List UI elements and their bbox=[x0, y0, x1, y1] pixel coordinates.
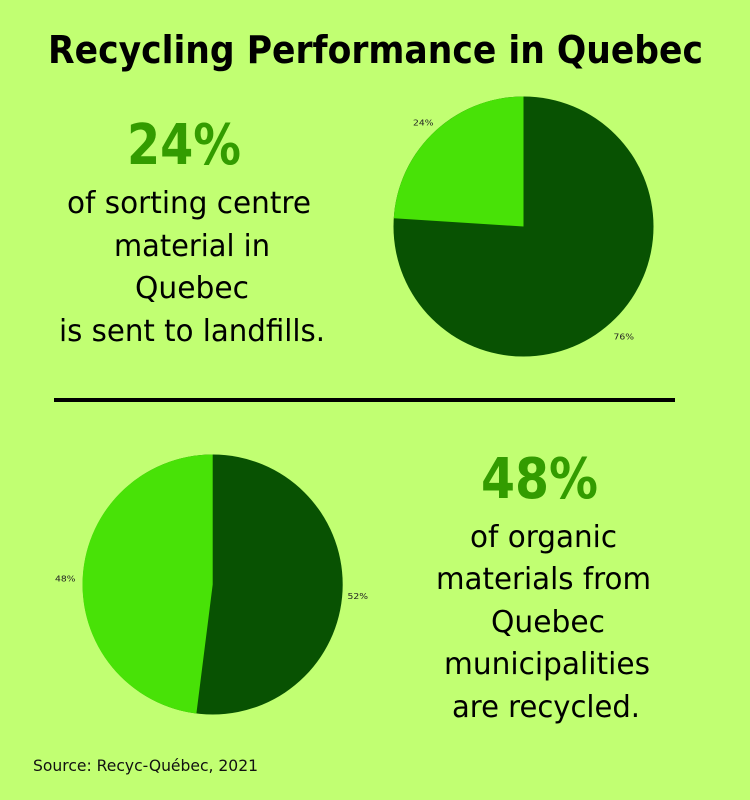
text block: sorting centre description: material in bbox=[114, 229, 270, 264]
divider line bbox=[54, 398, 675, 402]
pie chart: organic materials: 52% bbox=[348, 592, 368, 601]
text block: sorting centre description bbox=[59, 186, 325, 349]
pie chart: sorting centre material bbox=[394, 96, 654, 356]
text block: sorting centre description: Quebec bbox=[135, 271, 249, 306]
text block: sorting centre description: is sent to landfills. bbox=[59, 314, 325, 349]
text block: organic materials description: municipalities bbox=[444, 647, 650, 682]
source note: Source: Recyc-Québec, 2021 bbox=[33, 756, 258, 775]
text block: organic materials description: materials from bbox=[436, 562, 651, 597]
pie chart: organic materials bbox=[55, 454, 368, 714]
big number: 24%: 24% bbox=[127, 113, 241, 178]
text block: organic materials description: of organic bbox=[470, 520, 617, 555]
text block: organic materials description: Quebec bbox=[491, 605, 605, 640]
pie chart: organic materials: 48% bbox=[55, 574, 76, 584]
pie chart: sorting centre material: 24% bbox=[413, 118, 434, 128]
big number: 48%: 48% bbox=[481, 447, 598, 512]
title: Recycling Performance in Quebec bbox=[48, 28, 703, 72]
pie chart: sorting centre material: 76% bbox=[614, 332, 634, 342]
text block: organic materials description bbox=[436, 520, 651, 725]
text block: organic materials description: are recycled. bbox=[452, 690, 640, 725]
text block: sorting centre description: of sorting centre bbox=[67, 186, 311, 221]
panel: organic materials statistic bbox=[436, 447, 651, 725]
panel: sorting centre statistic bbox=[59, 113, 325, 349]
